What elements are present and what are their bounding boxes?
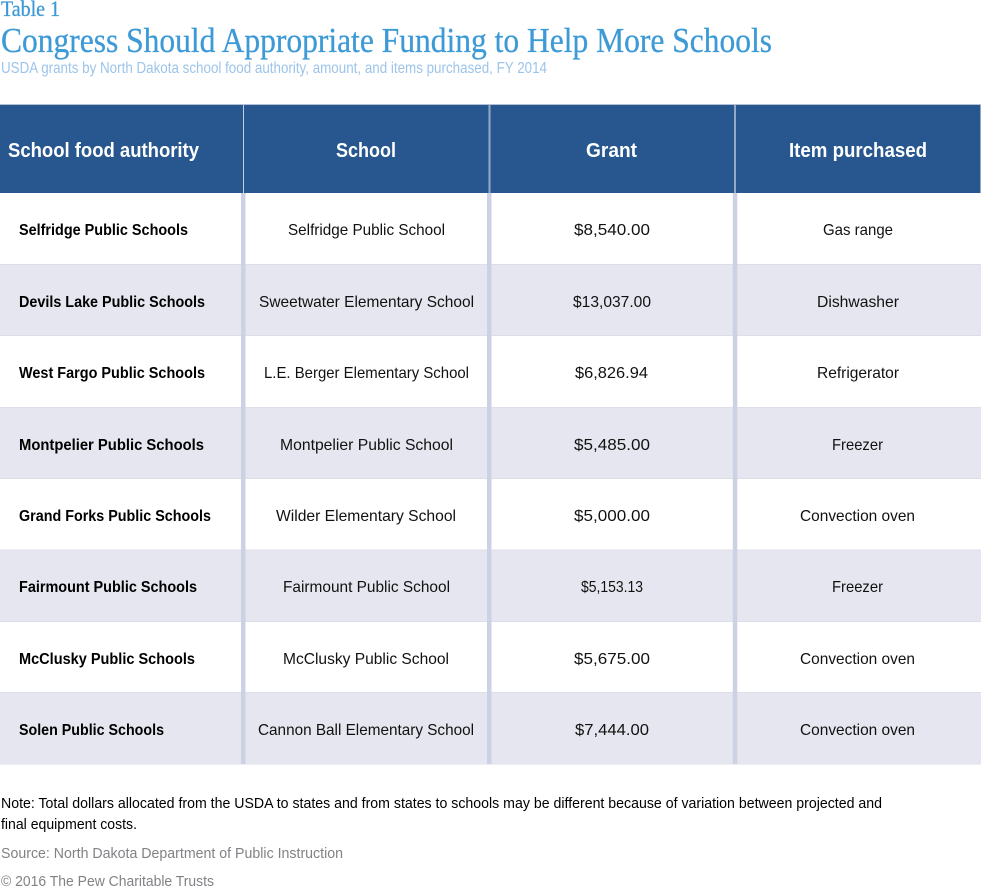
row: Devils Lake: Dishwasher: [817, 294, 900, 311]
row: Solen: [19, 722, 915, 739]
note: [1, 796, 882, 833]
row: Solen: Convection oven: [800, 722, 915, 739]
table header: [0, 104, 981, 193]
row: West Fargo: L.E. Berger Elementary School: [264, 365, 469, 382]
row: Solen: $7,444.00: [575, 722, 649, 739]
row: Montpelier: Montpelier Public Schools: [19, 437, 204, 454]
row: Fairmount: Freezer: [832, 579, 884, 596]
row: Selfridge: $8,540.00: [574, 222, 650, 239]
row: Fairmount: Fairmount Public Schools: [19, 579, 197, 596]
table: [0, 104, 981, 765]
row: Solen: Solen Public Schools: [19, 722, 164, 739]
row: McClusky: $5,675.00: [574, 651, 650, 668]
row: McClusky: [19, 651, 915, 668]
row: Grand Forks: Grand Forks Public Schools: [19, 508, 211, 525]
row: Selfridge: Gas range: [823, 222, 893, 239]
row: Montpelier: Freezer: [832, 437, 884, 454]
note: Note: Total dollars allocated from the USDA to states and from states to schools may be different because of variation between projected and: [1, 796, 882, 812]
row: Devils Lake: Devils Lake Public Schools: [19, 294, 205, 311]
row: Solen: Cannon Ball Elementary School: [258, 722, 474, 739]
row: West Fargo: Refrigerator: [817, 365, 900, 382]
row: West Fargo: [19, 365, 900, 382]
row: Devils Lake: $13,037.00: [573, 294, 651, 311]
row: Fairmount: $5,153.13: [581, 579, 643, 596]
row: Montpelier: Montpelier Public School: [280, 437, 453, 454]
row: Devils Lake: [19, 294, 900, 311]
row: Devils Lake: Sweetwater Elementary School: [259, 294, 474, 311]
row: Grand Forks: Wilder Elementary School: [276, 508, 456, 525]
row: Montpelier: $5,485.00: [574, 437, 650, 454]
table header: Item purchased: [789, 140, 927, 162]
subtitle: USDA grants by North Dakota school food authority, amount, and items purchased, FY 2014: [1, 60, 547, 77]
row: McClusky: McClusky Public School: [283, 651, 449, 668]
row: Grand Forks: [19, 508, 915, 525]
row: McClusky: McClusky Public Schools: [19, 651, 195, 668]
title: Congress Should Appropriate Funding to Help More Schools: [1, 21, 772, 60]
row: Fairmount: Fairmount Public School: [283, 579, 450, 596]
row: McClusky: Convection oven: [800, 651, 915, 668]
row: Fairmount: [19, 579, 884, 596]
source: Source: North Dakota Department of Public Instruction: [1, 846, 343, 862]
row: Selfridge: Selfridge Public School: [288, 222, 445, 239]
table header: School: [336, 140, 396, 162]
row backgrounds: [0, 193, 981, 765]
table header: Grant: [586, 140, 637, 162]
note: final equipment costs.: [1, 817, 137, 833]
row: Grand Forks: $5,000.00: [574, 508, 650, 525]
row: Montpelier: [19, 437, 884, 454]
row: Selfridge: Selfridge Public Schools: [19, 222, 188, 239]
row: West Fargo: $6,826.94: [575, 365, 648, 382]
row: Selfridge: [19, 222, 893, 239]
row: West Fargo: West Fargo Public Schools: [19, 365, 205, 382]
table header: School food authority: [8, 140, 200, 162]
row: Grand Forks: Convection oven: [800, 508, 915, 525]
